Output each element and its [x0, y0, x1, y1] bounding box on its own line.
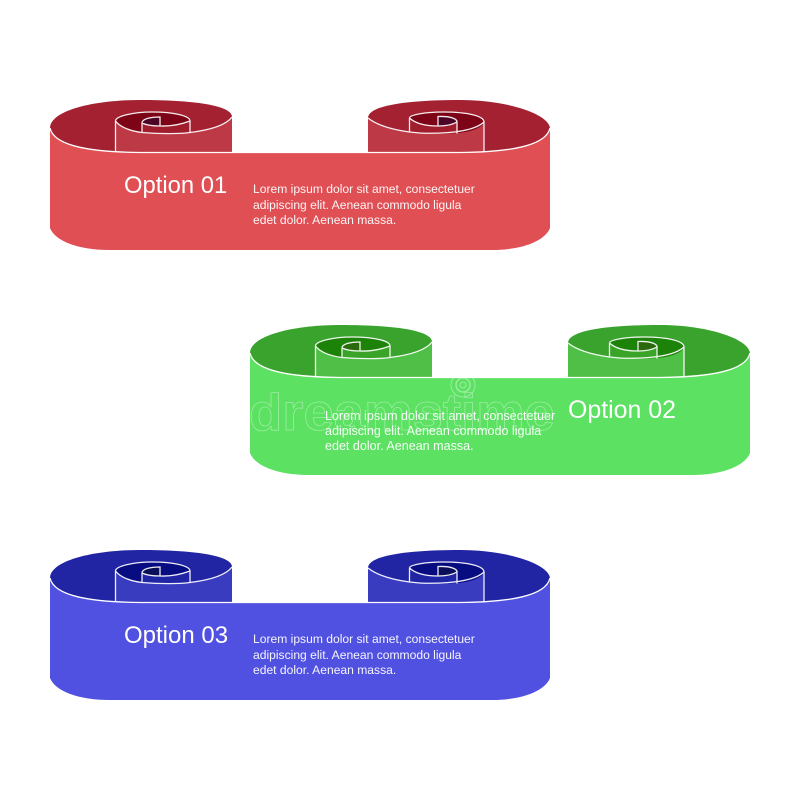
text block: option 03 description: edet dolor. Aenean massa. [253, 663, 396, 677]
ribbon band [50, 128, 550, 250]
text block: option 01 description: edet dolor. Aenean massa. [253, 213, 396, 227]
right scroll roll [368, 550, 550, 603]
ribbon band [50, 578, 550, 700]
ribbon band [250, 353, 750, 475]
text block: option 03 description: adipiscing elit. Aenean commodo ligula [253, 648, 462, 662]
left scroll roll [50, 100, 232, 153]
heading: Option 03: Option 03 [124, 622, 228, 649]
text block: option 02 description: adipiscing elit. Aenean commodo ligula [325, 424, 541, 438]
left scroll roll [250, 325, 432, 378]
panel: option 02 ribbon [249, 325, 750, 475]
text block: option 03 description [253, 632, 475, 677]
text block: option 02 description: edet dolor. Aenean massa. [325, 439, 474, 453]
text block: option 01 description: adipiscing elit. Aenean commodo ligula [253, 198, 462, 212]
panel: option 03 ribbon [50, 550, 550, 700]
text block: option 02 description: Lorem ipsum dolor sit amet, consectetuer [325, 409, 555, 423]
text block: option 01 description: Lorem ipsum dolor sit amet, consectetuer [253, 182, 475, 196]
panel: option 01 ribbon [50, 100, 550, 250]
text block: option 02 description [325, 409, 555, 453]
right scroll roll [568, 325, 750, 378]
right scroll roll [368, 100, 550, 153]
heading: Option 01: Option 01 [124, 172, 227, 199]
watermark: dreamstime [249, 384, 555, 442]
text block: option 03 description: Lorem ipsum dolor sit amet, consectetuer [253, 632, 475, 646]
text block: option 01 description [253, 182, 475, 227]
left scroll roll [50, 550, 232, 603]
heading: Option 02: Option 02 [568, 396, 676, 424]
